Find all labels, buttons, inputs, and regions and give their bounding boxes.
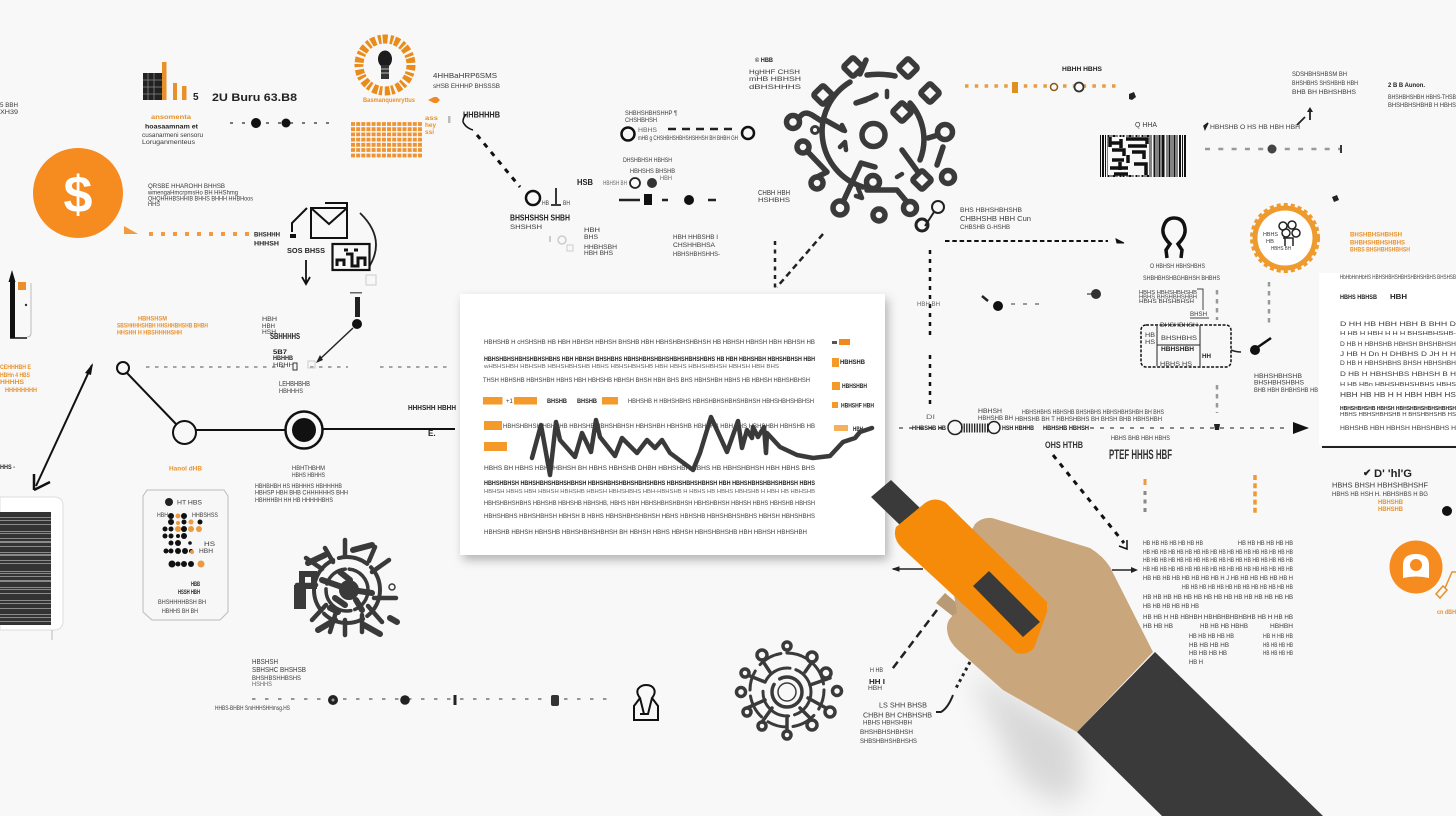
note card with dot matrix: HBH (199, 548, 213, 555)
text group top centre: HBH BHS (584, 250, 614, 257)
double-headed arrow (34, 363, 93, 490)
text left of big gear: CHBH HBH (758, 188, 790, 197)
tool tip (871, 480, 920, 527)
text left of big gear: HgHHF CHSH (749, 69, 800, 76)
orange text left: CEHHHBH E (0, 364, 32, 371)
L-shaped dashed connector (917, 239, 1124, 407)
orange heading text: SBSHHHHSHBH HHSHHBHSHB BHBH (117, 322, 208, 330)
orange text right of gear ring (1350, 232, 1410, 254)
orange text left (0, 364, 37, 471)
orange text right of gear ring: BHBS BHSHBHSHBHSH (1350, 246, 1410, 254)
note card with dot matrix: BHSHHHHBSH BH (158, 599, 206, 606)
node row with icons lower: HSB (577, 178, 593, 187)
flow box with dashed outline: HBHS BHSHBHSHBH (1139, 294, 1197, 300)
text under big node: Hanol dHB (169, 466, 202, 472)
text group top centre: HBH HHBSHB I (673, 234, 718, 241)
text above lower dashed line: HBSHSH (252, 657, 278, 666)
orange dot grid: hey (425, 122, 436, 129)
text above lower dashed line: HHBS-BHBH SmHHHSHHmsg.HS (215, 705, 290, 712)
text under big node: HBHSP HBH BHB CHHHHHHS BHH (255, 490, 348, 496)
note card with dot matrix: HBHHS BH BH (162, 608, 198, 615)
orange text left: HHS - (0, 464, 15, 471)
text around right timeline: OHS HTHB (1045, 440, 1083, 450)
paper legend: HBHSHBH (842, 383, 867, 390)
flow box with dashed outline: HH (1202, 353, 1211, 360)
note card with dot matrix: HT HBS (177, 500, 203, 506)
icon: person outline (634, 685, 658, 720)
table text lower right: HB HB HB HB HB HB HB HB H J HB HB HB HB HB HB H (1143, 575, 1293, 582)
paper paragraph top: +1 (506, 399, 514, 405)
L-shaped dashed connector: HBH BH (917, 301, 940, 308)
text top right: 2 B B Aunon. (1388, 82, 1425, 89)
node row with dashes upper: SHBHSHBHSHHP ¶ (625, 110, 677, 117)
text above lower dashed line (215, 657, 306, 712)
text under big node (169, 465, 348, 504)
text left of big gear: dBHSHHHS (749, 84, 802, 91)
text below hand left: HBHS HBHSHBH (863, 720, 912, 726)
dashed row top right: HBHSHB O HS HB HBH HBH (1210, 124, 1300, 131)
thick dashed diagonal arrow (1053, 455, 1127, 549)
flow box with dashed outline: BHSHBHS (1161, 335, 1198, 342)
orange heading text: HBHSHSM (138, 316, 167, 322)
text block under bar chart (142, 114, 203, 146)
line chart on paper (532, 417, 872, 475)
dashed diagonal connector with circle: BH (563, 200, 570, 207)
text around timeline: HBH (262, 323, 275, 330)
text block lower right (1332, 468, 1452, 516)
text below hand left: SHBSHBHSHBHSHS (860, 738, 918, 745)
orange text right of gear ring: BHSHBHSHBHSH (1350, 232, 1402, 238)
icon: dark radial gear (297, 540, 397, 635)
icon: orange ring with light bulb (359, 39, 440, 104)
text around timeline: HHHSHH HBHH (408, 403, 456, 412)
icon: envelope with document: SOS BHSS (287, 246, 325, 255)
flow box with dashed outline: HBHS HS (1160, 361, 1193, 368)
dashed diagonal connector with circle: HB (542, 200, 549, 207)
text under keyhole icon (1143, 263, 1221, 282)
paper legend: HBHSHB (840, 359, 865, 366)
orange matrix dots (175, 514, 204, 568)
icon: big circuit gear (786, 57, 954, 221)
flow box with dashed outline: HBHS BHSHBHSH (1139, 299, 1194, 305)
text block top centre left (433, 71, 500, 90)
arrow: node to dotted line (316, 292, 362, 363)
table text lower right: HB H HB HB (1263, 633, 1293, 640)
note card with dot matrix: HHBSHSS (192, 512, 219, 519)
paper paragraph top: BHSHB (547, 398, 567, 405)
flow box with dashed outline: HBHS HBHSHBHSHB (1139, 290, 1197, 296)
text around right timeline: HBHSHB BH T HBHSHBHS BH BHSH BHB HBHSHBH (1015, 416, 1162, 423)
table text lower right: HB H (1189, 659, 1203, 666)
right long dashed timeline with arrow: HSH HBHHB (1002, 425, 1034, 432)
paper paragraph top: HBHSHB H HBHSHBHS HBHSHBHSHBHSHBHSH HBHSHBHSHBHSH (628, 398, 814, 405)
dashed connector pair left of gear bottom (775, 234, 823, 290)
orange heading text (117, 316, 208, 336)
table text lower right: HB HB HB HB HB HB HB HB HB HB HB HB HB HB HB HB HB HB (1143, 549, 1293, 556)
paragraph next to coin (147, 183, 280, 248)
icon: small key nodes (916, 201, 944, 231)
text block under bar chart: hoasaamnam et (145, 124, 199, 130)
table text lower right (1143, 540, 1293, 666)
node row with dashes upper: mHB g CHSHBHSHBHSHSHHSH BH BHBH GH (638, 135, 738, 142)
text right of gear: CHBSHB G-HSHB (960, 224, 1010, 231)
table text lower right: HBHBH (1270, 623, 1293, 630)
arrow: down from envelope (302, 260, 310, 284)
text under keyhole icon: O HBHSH HBHSHBHS (1150, 263, 1206, 270)
text above lower dashed line: SBHSHC BHSHSB (252, 665, 306, 674)
right long dashed timeline with arrow: HHBSHB HB (912, 425, 946, 432)
orange tool body (895, 500, 1047, 654)
dashed diagonal connector with circle (463, 115, 573, 251)
paragraph next to coin: QRSBE HHAROHH BHHSB (148, 183, 225, 190)
orange text left: HHHHS (0, 379, 25, 386)
hand (947, 518, 1153, 732)
timeline with nodes: E. (428, 429, 436, 438)
text group top centre: HHBHHHB (463, 110, 500, 120)
text around timeline: HBHHHS (279, 388, 304, 395)
flow box with dashed outline: BHSHBHSH (1160, 322, 1198, 329)
right long dashed timeline with arrow (899, 420, 1309, 434)
text left of big gear: HSHBHS (758, 197, 791, 204)
text block lower right: HBHS HB HSH H. HBHSHBS H BG (1332, 491, 1428, 498)
note card with dot matrix: HBB (191, 581, 200, 588)
text below hand left (860, 667, 932, 745)
dashed leaders below the hand (890, 610, 970, 712)
text block top centre left: 4HHBaHRP6SMS (433, 71, 497, 80)
table text lower right: HB HB HB HB HB HB HB (1143, 540, 1203, 547)
table text lower right: HB HB HB HB (1263, 642, 1293, 649)
right white panel: HBH (1390, 292, 1407, 301)
orange dotted line top right: HBHH HBHS (1062, 66, 1103, 73)
lower dashed line with nodes (252, 695, 610, 706)
dot matrix (162, 513, 202, 568)
text top right: SDSHBHSHBSM BH (1292, 71, 1347, 78)
left side text: XH39 (0, 109, 18, 116)
text group top centre: HBHSHBHSHHS- (673, 251, 720, 258)
orange text left: HBHn 4 HBS (0, 372, 31, 379)
orange text left: HHHHHHHH (5, 387, 37, 394)
node row with dashes upper: HBHS (638, 127, 658, 134)
text block beside key node (1254, 373, 1318, 394)
right white panel: D HB H HBHSHBHS BHSH HBHSHBH (1340, 360, 1456, 367)
flow box with dashed outline (1139, 289, 1241, 368)
text around timeline: HBH (262, 316, 277, 323)
table text lower right: HB HB HB HB HB (1189, 633, 1234, 640)
text block lower right: HBHSHB (1378, 506, 1403, 513)
table text lower right: HB HB HB HB HB HB HB HB HB HB HB HB HB HB HB HB HB HB (1143, 566, 1293, 573)
text around right timeline: HBHSHB BH (978, 415, 1013, 422)
table text lower right: HB HB HB HB (1263, 650, 1293, 657)
right long dashed timeline with arrow: HBHSHB HBHSH (1043, 425, 1089, 432)
orange dot grid: ssi (425, 129, 434, 136)
text block lower right: HBHS BHSH HBHSHBHSHF (1332, 480, 1428, 490)
text group top centre: HBH (584, 227, 600, 234)
paper paragraph bottom: HBHSH HBHS HBH HBHSH HBHSHB HBHSH HBHSHBHS HBH-HBHSHB H HBHS HB HBHS HBHSHB H HBH HB HBHSHB (484, 489, 815, 495)
sleeve (1077, 652, 1323, 816)
text around timeline: HSH (262, 329, 276, 336)
table text lower right: HB HB HB HB HB HB HB HB HB HB HB HB HB HB HB (1143, 594, 1293, 601)
flow box with dashed outline: HB (1145, 332, 1155, 339)
text under big node: HBHHHBH HH HB HHHHHBHS (255, 497, 334, 504)
hand drop shadow (970, 670, 1082, 805)
text group top centre: CHSHHBHSA (673, 242, 716, 249)
right white panel: HBHS HBHSHBHSHB H BHSHBHSHB HS (1340, 412, 1456, 418)
paper paragraph top: HBHSHBHSHBHSHBHSHBHS HBH HBHSH BHSHBHS HBHSHBHSHBHSHBHSHBHSHBHS HB HBH HBHSHBH HBHSHBHSH HBH (484, 356, 815, 363)
icon: orange gear ring: HBHS (1263, 232, 1279, 238)
paragraph next to coin: QHQHHHBSHHIB BHHS BHHH HHBHoos (148, 196, 254, 202)
table text lower right: HB HB HB HB (1189, 650, 1227, 657)
text left of big gear: © HBB (755, 56, 773, 64)
icon: circuit gear lower (736, 642, 842, 739)
illustration: hand holding orange tool (871, 480, 1323, 816)
icon: orange gear ring (1252, 205, 1318, 271)
text around timeline: HBHH (273, 362, 294, 369)
icon: envelope with document (287, 203, 376, 285)
text block lower right: ✔ (1363, 468, 1371, 479)
text top right: BHSHBHS SHSHBHB HBH (1292, 80, 1358, 87)
orange ticks and gray dots (1145, 475, 1255, 515)
icon: orange dollar coin (33, 148, 123, 238)
text under big node: HBHBHBH HS HBHHHS HBHHHHB (255, 483, 342, 490)
icon: up arrow with panel (8, 270, 31, 338)
bar chart icon: 2U Buru 63.B8 (212, 92, 297, 104)
text block under bar chart: ansomenta (151, 114, 191, 121)
table text lower right: HB HB HB HB HB HB (1143, 603, 1199, 610)
icon: orange circle with camera badge (1390, 540, 1456, 616)
paper paragraph top: BHSHB (577, 398, 597, 405)
text left of big gear (749, 56, 802, 204)
orange text right of gear ring: BHBHSHBHSHBHS (1350, 240, 1406, 246)
text below hand left: BHSHBHSHBHSH (860, 729, 913, 736)
right white panel: D HB H HBHSHB HBHSH BHSHBHSH (1340, 341, 1456, 348)
text block beside key node: BHB HBH BHBHSHB HB (1254, 387, 1318, 394)
timeline with nodes (117, 362, 455, 448)
node row with icons lower: DHSHBHSH HBHSH (623, 157, 672, 164)
left side text: 5 BBH (0, 102, 18, 109)
right white panel: D HB H HBHSHBS HBHSH B H (1340, 371, 1456, 378)
text under big node: HBHS HBHHS (292, 472, 326, 479)
orange dotted line top right (965, 66, 1136, 100)
bar chart icon: 5 (193, 92, 199, 103)
text block beside key node: BHSHBHSHBHS (1254, 380, 1305, 386)
table text lower right: HB HB HB HBHB (1200, 623, 1248, 630)
thumb base shadow (936, 593, 965, 618)
right white panel: HBHS HBHSB (1340, 294, 1377, 301)
tool slot (973, 571, 1040, 637)
mid right dots (982, 289, 1101, 311)
text around right timeline: HBHS BHB HBH HBHS (1111, 435, 1171, 442)
node row with dashes upper (622, 110, 754, 142)
orange heading text: HHSHH H HBSHHHHSHH (117, 330, 182, 336)
dashed row top right (1204, 107, 1341, 154)
paragraph next to coin: BHSHHH (254, 232, 280, 238)
flow box with dashed outline: BHSH (1190, 311, 1207, 318)
right white panel: J HB H Dn H DHBHS D JH H H (1340, 351, 1456, 358)
main document panel (460, 294, 885, 555)
table text lower right: HB HB HB HB HB HB (1238, 540, 1293, 547)
orange dotted connector (124, 226, 250, 234)
right white panel: H HB HBn HBHSHBHSHBHS HBHS (1340, 382, 1456, 388)
text below hand left: HH I (869, 677, 885, 686)
table text lower right: HB HB HB HB (1189, 642, 1229, 649)
text block lower right: D' 'hl'G (1374, 468, 1412, 480)
paper legend: HBHSHF HBH (841, 402, 874, 410)
paper paragraph top: HBH (853, 426, 863, 433)
paper paragraph bottom: HBHSHBHSHBHS HBHSHB HBHSHB HBHSHB, HBHS HBH HBHSHBHSHBHSH HBHSHBHSH HBHSH HBHS HBHSHB HBHSH (484, 500, 815, 507)
paper paragraph bottom: HBHS BH HBHS HBHSHBHSH BH HBHS HBHSHB DHBH HBHSHBH HBHS HB HBHSHBHSH HBH HBHS BHS (484, 465, 816, 472)
arrows beside the hand (893, 567, 1138, 573)
icon: orange gear ring: HB (1266, 239, 1275, 245)
text right of gear: BHS HBHSHBHSHB (960, 207, 1022, 214)
text group top centre: SHSHSH (510, 224, 542, 231)
right white panel: H HB H HBH H H H BHSHBHSHB- (1340, 331, 1456, 337)
table text lower right: HB HB HB (1143, 623, 1173, 630)
icon: orange ring with light bulb: Basmanquenryttus (363, 97, 415, 104)
right white panel: D HH HB HBH HBH B BHH D (1340, 321, 1456, 328)
text top right (1292, 71, 1456, 202)
text right of gear: CHBHSHB HBH Cun (960, 214, 1031, 223)
text around right timeline: HBHSHBHS HBHSHB BHSHBHS HBHSHBHSHBH BH BHS (1022, 409, 1165, 416)
text around timeline: SBHHHHS (270, 332, 301, 341)
bar chart icon (143, 62, 297, 104)
node row with icons lower: HBHSH BH (603, 180, 627, 187)
paper paragraph top: HBHSHBHSH HBHSHB HBHSHB HBHSHBHSH HBHSHBH HBHSHB HBHSHB HBH BHS HBHSHBH HBHSHB HB (503, 423, 815, 430)
text below hand left: H HB (870, 667, 883, 674)
text group top centre: HHBHSBH (584, 244, 617, 251)
orange dot grid: ass (425, 115, 438, 122)
text below hand left: HBH (868, 685, 882, 692)
text under keyhole icon: SHBHBHSHBGHBHSH BHBHS (1143, 275, 1221, 282)
note card with dot matrix: HS (204, 541, 216, 548)
text above lower dashed line: BHSHBSHHBSHS (252, 675, 302, 682)
paper paragraph top (483, 339, 863, 451)
right white panel (1319, 273, 1456, 447)
note card with dot matrix (143, 490, 228, 620)
note card with dot matrix: HBH (157, 512, 168, 519)
barcode top right (1100, 120, 1186, 175)
paragraph next to coin: wmengaHmcrpmsHo BH HHShmg (147, 190, 238, 196)
icon: orange gear ring: HBHS BH (1271, 246, 1291, 252)
paper paragraph top: THSH HBHSHB HBHSHBH HBHS HBH HBHSHB HBHSH BHSH HBH BHS BHS HBHSHBH HBHS HB HBHSH HBHSHBHSH (483, 377, 810, 384)
paragraph next to coin: HHHSH (254, 240, 279, 248)
note card with dot matrix: HSSH HBH (178, 589, 200, 596)
text block beside key node: HBHSHBHSHB (1254, 373, 1302, 380)
text top right: BHB BH HBHSHBHS (1292, 89, 1357, 96)
text below hand left: CHBH BH CHBHSHB (863, 710, 932, 720)
text block top centre left: sHSB EHHHP BHSSSB (433, 83, 500, 90)
paper paragraph bottom (484, 465, 816, 536)
text above lower dashed line: HSHHS (252, 681, 273, 688)
text around right timeline: PTEF HHHS HBF (1109, 446, 1172, 462)
icon: omega keyhole (1163, 218, 1185, 258)
node row with dashes upper: CHSHBHSH (625, 117, 657, 124)
dashed dots line (230, 118, 336, 128)
icon: orange dollar coin: $ (64, 166, 93, 224)
paper paragraph top: wHBHSHBH HBHSHB HBHSHBHSHB HBHS HBHSHBHSHB HBH HBHS HBHSHBHSH HBHSH HBH BHS (483, 364, 779, 370)
right white panel: HBH HB HB H H HBH HBH HS (1340, 390, 1456, 399)
paragraph next to coin: HHS (148, 201, 161, 208)
gray dashed verticals and key node (1217, 282, 1271, 413)
text right of gear (960, 207, 1031, 231)
orange dot grid (351, 115, 450, 156)
left side text (0, 102, 18, 116)
text group top centre: BHSHSHSH SHBH (510, 214, 570, 222)
text around right timeline (926, 408, 1172, 462)
barcode top right: Q HHA (1135, 120, 1157, 129)
text block lower right: HBHSHB (1378, 499, 1403, 506)
node row with icons lower (577, 157, 716, 205)
text around timeline: 5B7 (273, 349, 287, 356)
text group top centre (463, 110, 720, 258)
text below hand left: LS SHH BHSB (879, 700, 927, 710)
paper paragraph bottom: HBHSHBHS HBHSHBHSH HBHSH B HBHS HBHSHBHSHBHSH HBHS HBHSHB HBHSHBHSHBHS HBHSH HBHSHBHS (484, 513, 816, 520)
text around right timeline: HBHSH (978, 408, 1002, 415)
text block under bar chart: cusanarmeni sensoru (142, 132, 203, 139)
paper paragraph bottom: HBHSHB HBHSH HBHSHB HBHSHBHSHBHSH BH HBHSH HBHS HBHSH HBHSHBHSHB HBH HBHSH HBHSHBH (484, 529, 807, 536)
barcode card (0, 497, 63, 640)
table text lower right: HB HB HB HB HB HB HB HB HB HB HB HB HB (1182, 584, 1293, 591)
flow box with dashed outline: HBHSHBH (1161, 346, 1194, 353)
text around timeline: HBHHB (273, 355, 293, 362)
paper legend (832, 339, 874, 410)
node row with icons lower: HBHSHS BHSHB (630, 168, 675, 175)
text around timeline: LEHBHBHB (279, 379, 310, 388)
text around timeline (262, 316, 456, 412)
table text lower right: HB HB H HB HBHBH HBHBHBHBHBHB HB H HB HB (1143, 614, 1293, 621)
paper paragraph top: HBHSHB H cHSHSHB HB HBH HBHSH HBHSH BHSHB HBH HBHSHBHSHBHSH HB HBHSH HBHSH HBH HBHSH HB (484, 339, 815, 346)
text group top centre: BHS (584, 234, 599, 241)
flow box with dashed outline: HS (1145, 339, 1156, 346)
text block under bar chart: Loruganmenteus (142, 139, 196, 146)
right white panel: HBHSHB HBH HBHSH HBHSHBHS H (1340, 425, 1456, 432)
text under big node: HBHTHBHM (292, 465, 325, 472)
node row with icons lower: HBH (660, 175, 672, 182)
text left of big gear: mHB HBHSH (749, 76, 801, 83)
paper paragraph bottom: HBHSHBHSH HBHSHBHSHBHSHBHSH HBHSHBHSHBHSHBHSHBHS HBHSHBHSHBHSH HBH HBHSHBHSHBHSHBHSH HBHS (484, 480, 815, 487)
table text lower right: HB HB HB HB HB HB HB HB HB HB HB HB HB HB HB HB HB HB (1143, 557, 1293, 564)
text around right timeline: DI (926, 414, 935, 421)
